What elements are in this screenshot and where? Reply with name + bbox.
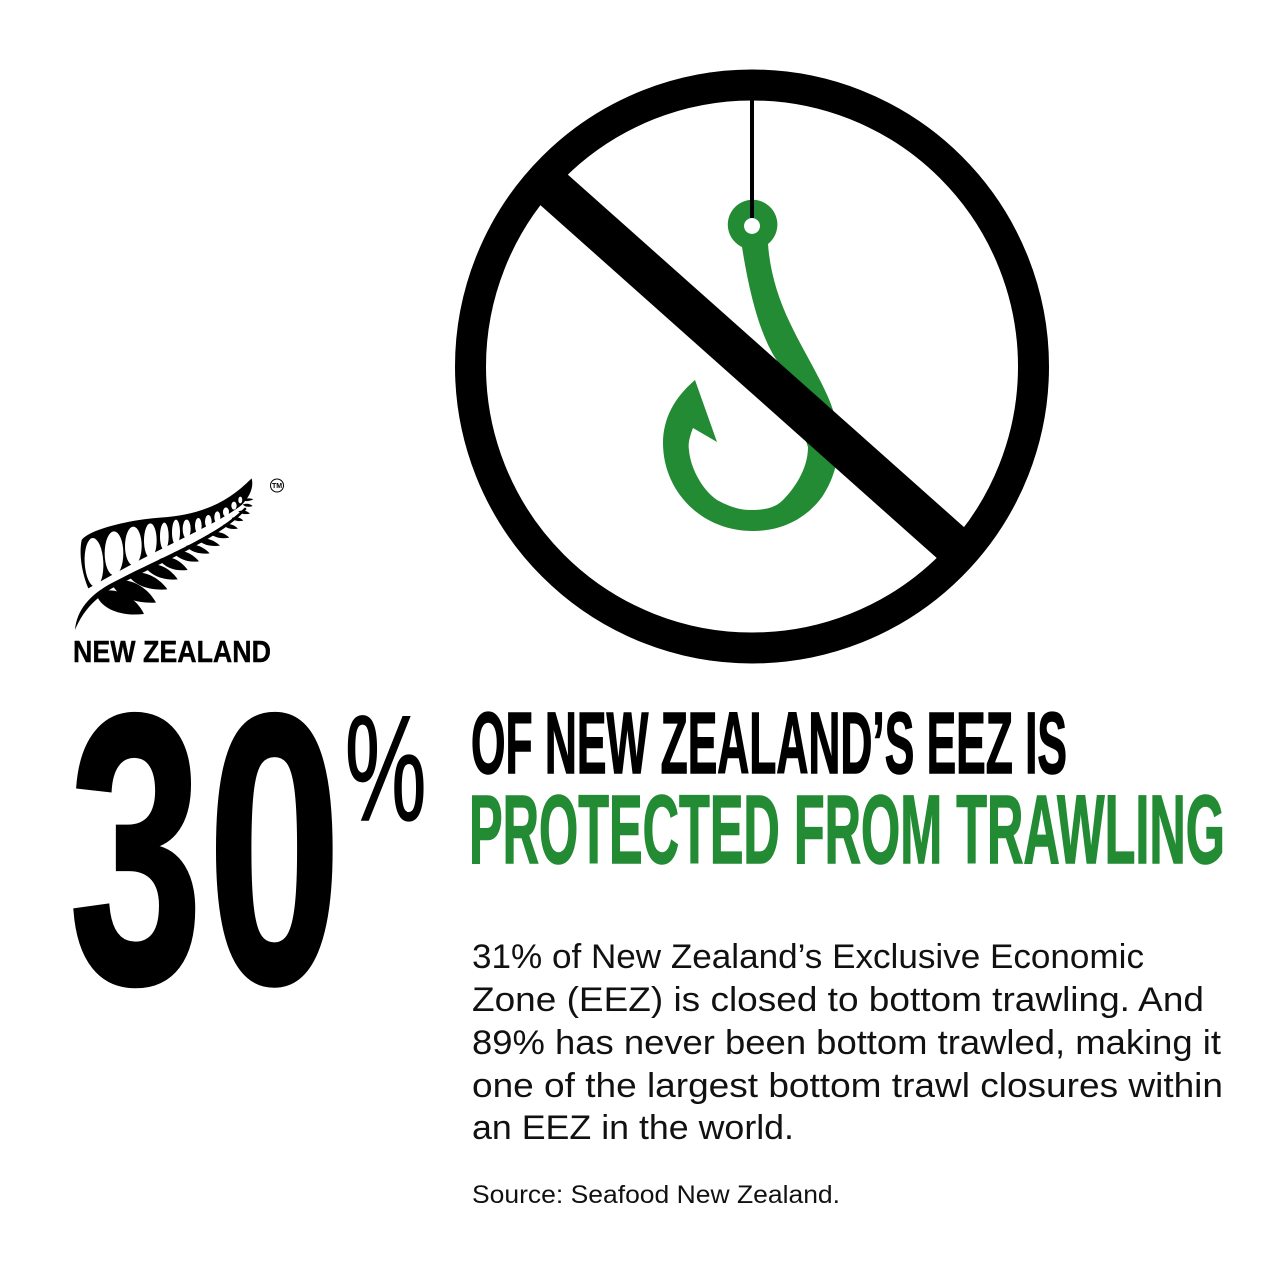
logo: New Zealand fern mark	[73, 478, 284, 669]
body text: 31% of New Zealand’s Exclusive Economic	[472, 938, 1144, 976]
body text: an EEZ in the world.	[472, 1109, 794, 1147]
body text: 89% has never been bottom trawled, making it	[472, 1024, 1222, 1062]
source note: Source: Seafood New Zealand.	[472, 1181, 840, 1209]
icon: trademark	[270, 479, 284, 492]
icon: prohibition bar	[529, 165, 974, 568]
icon: trademark: TM	[272, 483, 282, 490]
icon: silver fern	[75, 478, 253, 630]
big stat: 30 percent	[69, 634, 426, 1064]
icon: prohibition ring	[470, 85, 1034, 648]
logo text: NEW ZEALAND	[73, 635, 271, 669]
body text: Zone (EEZ) is closed to bottom trawling. And	[472, 981, 1204, 1019]
body text	[472, 938, 1223, 1147]
icon: fishing line	[750, 85, 754, 218]
number 30: 30	[69, 634, 341, 1064]
body text: one of the largest bottom trawl closures within	[472, 1067, 1223, 1105]
icon: green hook	[663, 200, 838, 531]
percent sign: %	[345, 686, 426, 853]
icon: prohibited fishing hook	[470, 85, 1034, 648]
